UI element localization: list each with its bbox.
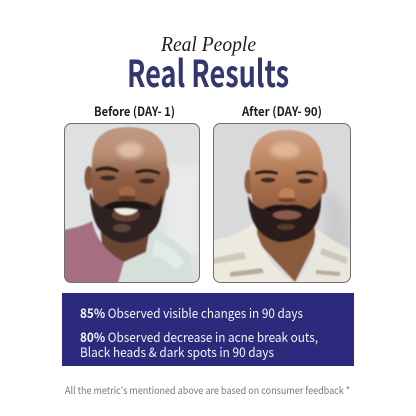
tee: pink side [64,221,124,283]
head [92,127,167,216]
shirt left [213,222,295,283]
ears [244,170,254,194]
stat: 80%: Black heads & dark spots in 90 days [80,342,274,361]
photo: before [64,123,200,283]
photo frame: before [64,124,200,282]
neck [256,225,316,282]
eyebrows [95,166,119,173]
tee highlight [152,241,183,269]
moustache [102,201,152,210]
heading: Real Results: Real Results [127,44,289,98]
stat: 80% [80,327,318,361]
stat: 80%: 80% Observed decrease in acne break outs, [80,327,318,346]
forehead highlight [270,142,300,158]
shirt right [295,228,351,283]
footnote: All the metric's mentioned above are based on consumer feedback * [65,382,350,397]
head [250,130,323,218]
label: before: Before (DAY- 1) [94,101,175,120]
forehead highlight [117,142,143,158]
nose [279,188,295,200]
beard [248,195,321,242]
lips [273,210,301,220]
beard [90,192,162,243]
eyes [260,177,276,183]
title: Real People: Real People [160,32,256,56]
panel: results [62,293,354,366]
eyebrows [255,170,278,175]
photo frame: after [214,124,350,282]
tee: white side [118,228,193,283]
chin patch [277,224,295,230]
nose [119,186,135,198]
shirt stripes [213,252,246,264]
teeth [114,208,138,215]
neck [100,230,150,263]
mouth [112,208,140,222]
label: after: After (DAY- 90) [241,101,322,120]
ears [84,166,94,190]
moustache [264,205,306,211]
eyes [100,175,116,181]
chin patch [113,224,131,232]
photo: after [213,123,351,283]
stat: 85%: 85% Observed visible changes in 90 days [80,303,303,322]
